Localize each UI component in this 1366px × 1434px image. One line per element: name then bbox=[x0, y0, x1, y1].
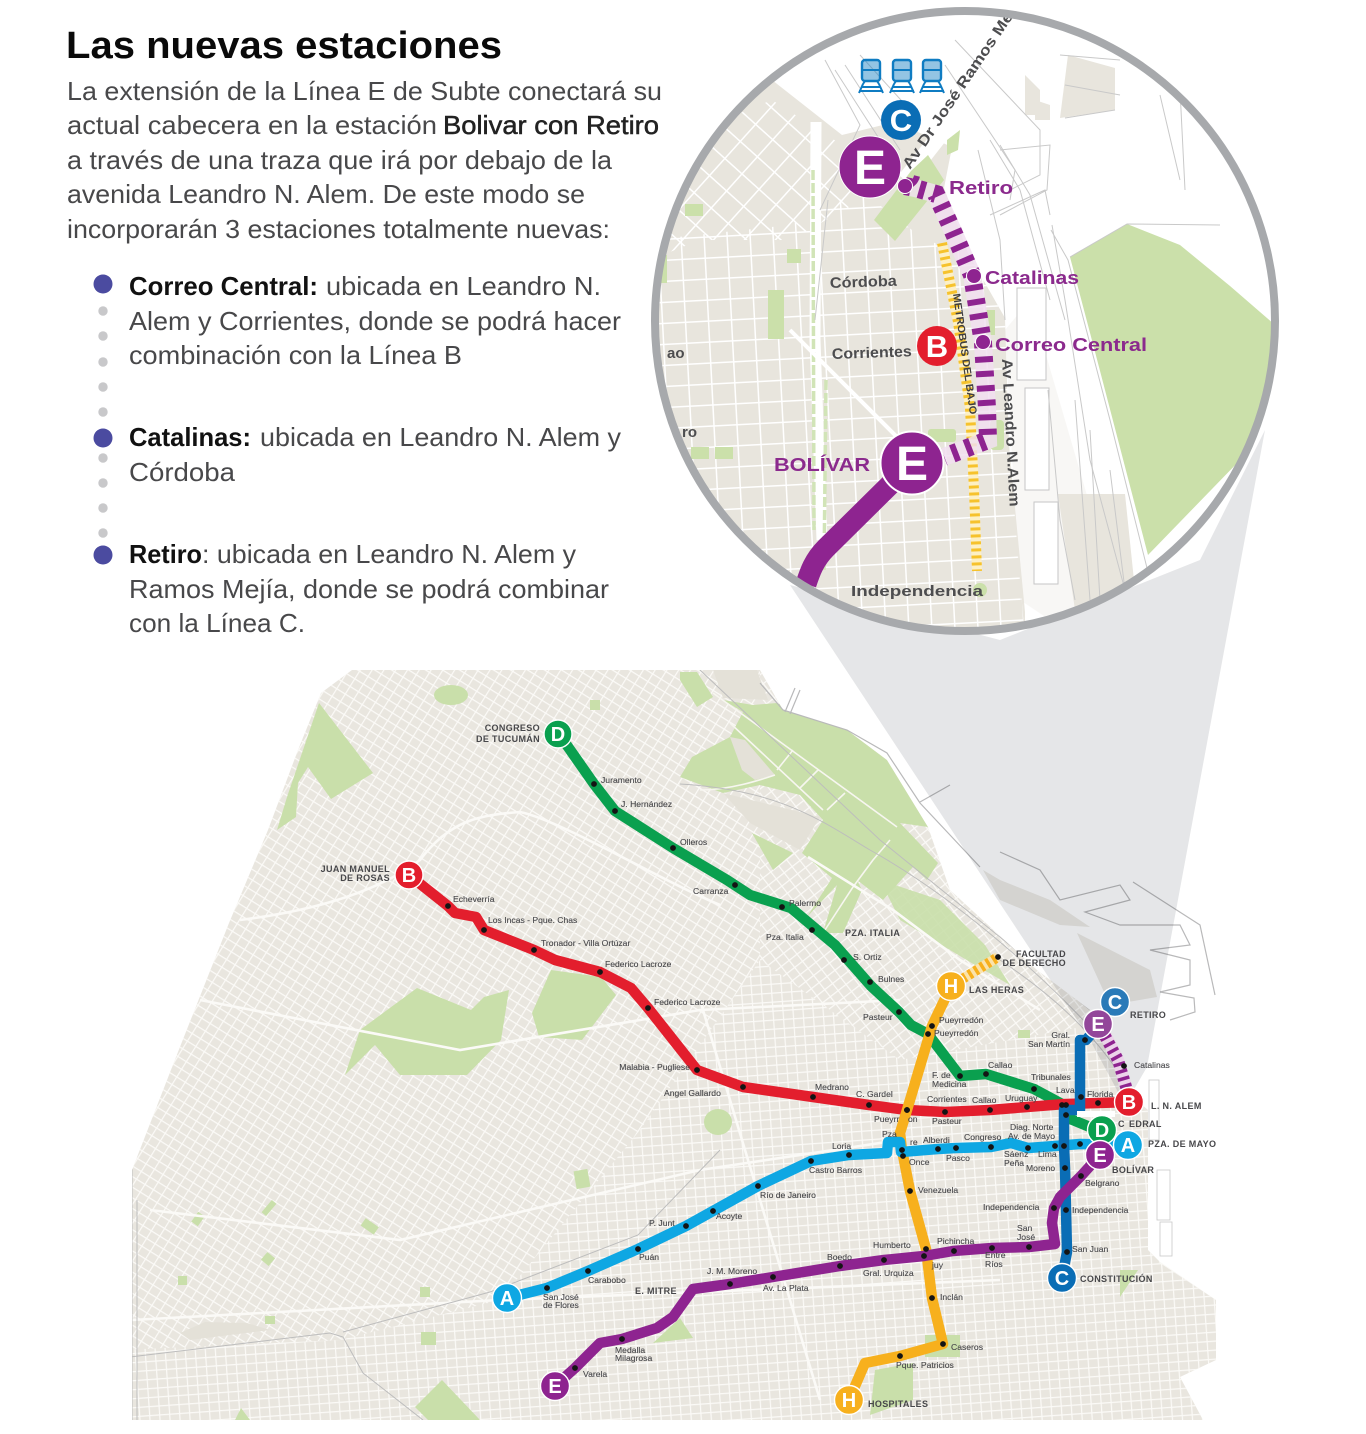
intro paragraph: incorporarán 3 estaciones totalmente nuevas: bbox=[67, 214, 610, 244]
station labels: Puán bbox=[639, 1252, 659, 1262]
badge A west bbox=[492, 1284, 522, 1312]
station labels: C. Gardel bbox=[856, 1089, 893, 1099]
street labels: ao bbox=[667, 345, 685, 362]
station labels: Av. de Mayo bbox=[1008, 1131, 1055, 1141]
station labels bbox=[321, 723, 1216, 1409]
badge D Catedral bbox=[1088, 1116, 1116, 1144]
station names: BOLÍVAR bbox=[774, 454, 870, 475]
badge H north: H bbox=[944, 976, 958, 998]
intro paragraph: La extensión de la Línea E de Subte conectará su bbox=[67, 76, 662, 106]
badge A Plaza de Mayo: A bbox=[1121, 1135, 1135, 1157]
station labels: Alberdi bbox=[923, 1135, 950, 1145]
station labels: Federico Lacroze bbox=[605, 959, 672, 969]
station text: Retiro bbox=[129, 539, 609, 638]
station labels: Diag. Norte bbox=[1010, 1122, 1054, 1132]
station E Bolivar bbox=[880, 432, 944, 494]
port and river outline bbox=[760, 683, 1215, 1020]
station labels: Río de Janeiro bbox=[760, 1190, 816, 1200]
station labels: RETIRO bbox=[1130, 1010, 1166, 1020]
parks in zoom bbox=[655, 130, 1275, 597]
station C Retiro bbox=[881, 100, 921, 140]
station B Corrientes: B bbox=[926, 329, 948, 364]
circle ring bbox=[655, 11, 1275, 631]
badge E west bbox=[540, 1372, 570, 1400]
station labels: San José bbox=[543, 1292, 579, 1302]
station labels: Tribunales bbox=[1031, 1072, 1071, 1082]
city base map bbox=[120, 660, 1230, 1430]
station text: Catalinas: Córdoba bbox=[129, 457, 236, 487]
station labels: PZA. DE MAYO bbox=[1148, 1139, 1216, 1149]
station labels: LAS HERAS bbox=[969, 985, 1024, 995]
station labels: FACULTAD bbox=[1016, 949, 1066, 959]
line E existing bbox=[797, 477, 898, 588]
magnifier cone bbox=[790, 430, 1265, 1105]
avenue strip bbox=[815, 122, 822, 540]
timeline of bullets bbox=[94, 274, 112, 564]
station labels: Los Incas - Pque. Chas bbox=[488, 915, 577, 925]
station labels: Palermo bbox=[789, 898, 821, 908]
station labels: DE ROSAS bbox=[340, 873, 390, 883]
station labels: Varela bbox=[583, 1369, 607, 1379]
station labels: C bbox=[1118, 1119, 1125, 1129]
station labels: JUAN MANUEL bbox=[321, 864, 390, 874]
badge A west: A bbox=[500, 1288, 514, 1310]
station labels: Belgrano bbox=[1085, 1178, 1120, 1188]
subway lines bbox=[409, 734, 1130, 1400]
badge B Alem bbox=[1114, 1088, 1144, 1116]
badge H north bbox=[936, 972, 966, 1000]
station names: Catalinas bbox=[985, 268, 1079, 288]
station labels: Pueyrredón bbox=[934, 1028, 979, 1038]
station dot Catalinas bbox=[966, 268, 982, 284]
station labels: Humberto bbox=[873, 1240, 911, 1250]
station labels: Acoyte bbox=[716, 1211, 742, 1221]
badge E Bolivar bbox=[1086, 1140, 1114, 1170]
station labels: Federico Lacroze bbox=[654, 997, 721, 1007]
station labels: José bbox=[1017, 1232, 1035, 1242]
street labels: ro bbox=[682, 424, 697, 441]
badge B west: B bbox=[402, 865, 416, 887]
station dots bbox=[445, 781, 1127, 1371]
station labels: Carranza bbox=[693, 886, 729, 896]
station labels: EDRAL bbox=[1129, 1119, 1162, 1129]
station labels: Pza bbox=[882, 1129, 897, 1139]
station labels: Pueyrredón bbox=[939, 1015, 984, 1025]
badge C Retiro: C bbox=[1108, 992, 1122, 1014]
metrobus label: METROBUS DEL BAJO bbox=[950, 293, 979, 415]
title: Las nuevas estaciones bbox=[66, 25, 502, 67]
intro paragraph: a través de una traza que irá por debajo de la bbox=[67, 145, 613, 175]
park paths bbox=[700, 693, 897, 933]
station labels: BOLÍVAR bbox=[1112, 1165, 1154, 1175]
badge E Retiro: E bbox=[1091, 1014, 1105, 1036]
station labels: Venezuela bbox=[918, 1185, 958, 1195]
parks bbox=[178, 672, 1216, 1420]
station labels: HOSPITALES bbox=[868, 1399, 928, 1409]
station labels: Loria bbox=[832, 1141, 851, 1151]
line terminals badges bbox=[395, 720, 1144, 1414]
station labels: Callao bbox=[988, 1060, 1013, 1070]
badge D north bbox=[544, 720, 572, 748]
station text: Retiro: Retiro bbox=[129, 539, 202, 569]
station labels: Catalinas bbox=[1134, 1060, 1170, 1070]
station labels: J. M. Moreno bbox=[707, 1266, 757, 1276]
port pieces bbox=[983, 870, 1157, 1005]
badge B Alem: B bbox=[1122, 1092, 1136, 1114]
station labels: Pueyrr bbox=[874, 1114, 899, 1124]
line B red bbox=[409, 875, 1130, 1112]
station labels: P. Junt bbox=[649, 1218, 675, 1228]
avenues bbox=[132, 812, 1216, 1400]
station text: Retiro: Ramos Mejía, donde se podrá combinar bbox=[129, 574, 609, 604]
station labels: PZA. ITALIA bbox=[845, 928, 900, 938]
station labels: J. Hernández bbox=[621, 799, 672, 809]
station labels: San Juan bbox=[1072, 1244, 1109, 1254]
badge A Plaza de Mayo bbox=[1114, 1130, 1142, 1160]
station labels: Pasteur bbox=[932, 1116, 962, 1126]
line E extension bbox=[1100, 1024, 1130, 1100]
station labels: Entre bbox=[985, 1250, 1006, 1260]
yard buildings bbox=[1149, 1080, 1172, 1256]
intro paragraph: Bolivar con Retiro bbox=[443, 110, 659, 140]
station labels: F. de bbox=[932, 1070, 951, 1080]
station labels: Echeverría bbox=[453, 894, 495, 904]
badge E Bolivar: E bbox=[1093, 1145, 1107, 1167]
station text: Retiro: con la Línea C. bbox=[129, 608, 305, 638]
badge D north: D bbox=[551, 724, 565, 746]
station labels: Olleros bbox=[680, 837, 707, 847]
station labels: Medrano bbox=[815, 1082, 849, 1092]
station labels: Florida bbox=[1087, 1089, 1113, 1099]
station names: Retiro bbox=[949, 178, 1013, 198]
station labels: Corrientes bbox=[927, 1094, 967, 1104]
station labels: Independencia bbox=[983, 1202, 1040, 1212]
line A light blue bbox=[507, 1142, 1128, 1298]
badge E Retiro bbox=[1084, 1010, 1112, 1038]
station text: Catalinas bbox=[129, 422, 621, 487]
station B Corrientes bbox=[917, 326, 957, 366]
station labels: Moreno bbox=[1026, 1163, 1055, 1173]
station labels: Lava bbox=[1056, 1085, 1075, 1095]
station labels: Bulnes bbox=[878, 974, 904, 984]
road Ramos Mejia bbox=[900, 137, 944, 178]
station labels: Boedo bbox=[827, 1252, 852, 1262]
station labels: Pza. Italia bbox=[766, 932, 804, 942]
station labels: CONSTITUCIÓN bbox=[1080, 1273, 1153, 1284]
line C dark blue bbox=[1062, 1024, 1100, 1278]
station labels: Congreso bbox=[964, 1132, 1001, 1142]
intro paragraph bbox=[67, 76, 662, 244]
magnified circle map bbox=[650, 0, 1275, 640]
station labels: San Martín bbox=[1028, 1039, 1070, 1049]
station labels: Independencia bbox=[1072, 1205, 1129, 1215]
station labels: Gral. Urquiza bbox=[863, 1268, 914, 1278]
station labels: juy bbox=[931, 1260, 944, 1270]
intro paragraph: actual cabecera en la estación bbox=[67, 110, 437, 140]
badge C Retiro bbox=[1100, 988, 1130, 1016]
train icons bbox=[859, 60, 944, 93]
station names bbox=[774, 178, 1147, 475]
station labels: Juramento bbox=[601, 775, 642, 785]
station labels: DE TUCUMÁN bbox=[476, 734, 540, 744]
street labels bbox=[667, 273, 984, 600]
line E purple bbox=[555, 1155, 1100, 1386]
badge C Constitucion bbox=[1048, 1264, 1076, 1292]
station labels: Sáenz bbox=[1004, 1149, 1028, 1159]
station text: Correo Central: combinación con la Línea B bbox=[129, 340, 462, 370]
station labels: Milagrosa bbox=[615, 1353, 652, 1363]
station text: Correo Central: Alem y Corrientes, donde se podrá hacer bbox=[129, 306, 621, 336]
station labels: L. N. ALEM bbox=[1151, 1101, 1202, 1111]
white bar bbox=[1077, 1111, 1115, 1117]
badge E west: E bbox=[548, 1376, 562, 1398]
station C Retiro: C bbox=[890, 103, 912, 138]
station labels: de Flores bbox=[543, 1300, 579, 1310]
station labels: Inclán bbox=[940, 1292, 963, 1302]
decor: beige city blocks bbox=[650, 80, 1025, 640]
station text: Catalinas: Catalinas: bbox=[129, 422, 251, 452]
rail and port outlines bbox=[815, 40, 1220, 600]
street labels: Independencia bbox=[851, 583, 984, 600]
station labels: Once bbox=[909, 1157, 930, 1167]
station labels: Castro Barros bbox=[809, 1165, 862, 1175]
station text: Catalinas: ubicada en Leandro N. Alem y bbox=[260, 422, 621, 452]
line E extension bbox=[905, 186, 988, 457]
station names: Correo Central bbox=[995, 335, 1147, 355]
station E Retiro: E bbox=[854, 142, 886, 195]
station labels: Uruguay bbox=[1005, 1093, 1038, 1103]
metrobus line bbox=[942, 243, 977, 571]
station labels: Malabia - Pugliese bbox=[619, 1062, 690, 1072]
station labels: Carabobo bbox=[588, 1275, 626, 1285]
station labels: CONGRESO bbox=[485, 723, 540, 733]
station labels: Tronador - Villa Ortúzar bbox=[541, 938, 630, 948]
station text: Correo Central: ubicada en Leandro N. bbox=[326, 271, 601, 301]
station E Retiro bbox=[839, 136, 901, 198]
station labels: Medicina bbox=[932, 1079, 967, 1089]
station labels: Lima bbox=[1038, 1149, 1057, 1159]
station dot Retiro bbox=[898, 178, 912, 194]
decor: port blocks bbox=[1005, 55, 1135, 620]
badge C Constitucion: C bbox=[1055, 1268, 1069, 1290]
station labels: Pque. Patricios bbox=[896, 1360, 954, 1370]
station labels: Av. La Plata bbox=[763, 1283, 809, 1293]
station labels: San bbox=[1017, 1223, 1033, 1233]
station labels: S. Ortiz bbox=[853, 952, 882, 962]
station labels: on bbox=[908, 1114, 918, 1124]
rail lines bbox=[130, 670, 1187, 1420]
station labels: Pasco bbox=[946, 1153, 970, 1163]
station labels: Ríos bbox=[985, 1259, 1003, 1269]
station labels: Gral. bbox=[1051, 1030, 1070, 1040]
station labels: re bbox=[910, 1137, 918, 1147]
decor: beige open blocks bbox=[180, 670, 819, 1340]
station labels: Callao bbox=[972, 1095, 997, 1105]
station labels: Caseros bbox=[951, 1342, 983, 1352]
street labels: Córdoba bbox=[830, 273, 898, 292]
station labels: Angel Gallardo bbox=[664, 1088, 721, 1098]
station labels: Pichincha bbox=[937, 1236, 974, 1246]
intro paragraph: avenida Leandro N. Alem. De este modo se bbox=[67, 179, 585, 209]
line H planned bbox=[951, 957, 998, 986]
avenue label Alem: Av Leandro N.Alem bbox=[998, 358, 1023, 507]
badge H south bbox=[834, 1386, 864, 1414]
badge D Catedral: D bbox=[1095, 1120, 1109, 1142]
station text: Correo Central bbox=[129, 271, 621, 370]
badge B west bbox=[395, 861, 423, 889]
station text: Correo Central: Correo Central: bbox=[129, 271, 318, 301]
avenue label Ramos Mejia: Av Dr José Ramos Mejía bbox=[899, 0, 1028, 172]
station labels: Medalla bbox=[615, 1345, 645, 1355]
station labels: DE DERECHO bbox=[1002, 958, 1066, 968]
station labels: Peña bbox=[1004, 1158, 1024, 1168]
street labels: Corrientes bbox=[832, 343, 912, 363]
badge H south: H bbox=[842, 1390, 856, 1412]
line D green bbox=[559, 734, 1062, 1104]
line H yellow bbox=[849, 986, 951, 1400]
station E Bolivar: E bbox=[896, 438, 928, 491]
lake in park bbox=[730, 737, 775, 780]
station dot Correo Central bbox=[976, 334, 990, 350]
station text: Retiro: : ubicada en Leandro N. Alem y bbox=[202, 539, 576, 569]
station labels: Pasteur bbox=[863, 1012, 893, 1022]
station labels: E. MITRE bbox=[635, 1286, 677, 1296]
